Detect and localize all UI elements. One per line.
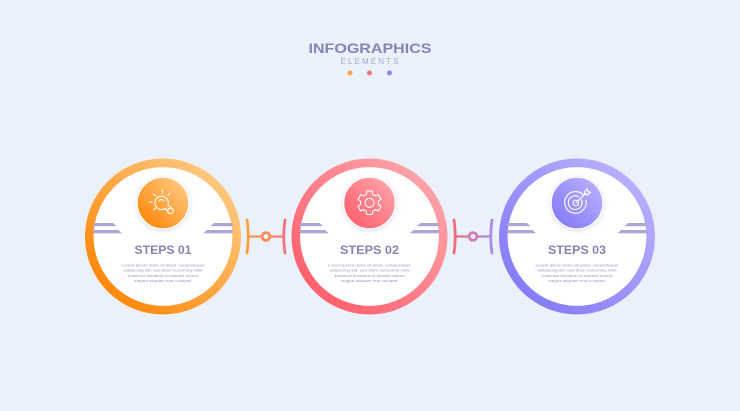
- connector 1: [247, 220, 285, 253]
- step 02 body text: magna aliquam erat volutpat.: [340, 278, 398, 283]
- decorative bars left: [507, 223, 536, 233]
- title: INFOGRAPHICS: [308, 40, 432, 56]
- decorative bars left: [93, 223, 122, 233]
- icon: gear badge: [344, 177, 395, 229]
- step 02 body text: euismod tincidunt ut laoreet dolore: [334, 273, 406, 278]
- panel: step 02: [296, 163, 443, 310]
- decorative bars right: [410, 223, 440, 233]
- step 03 body text: [536, 262, 619, 283]
- step 01 heading: STEPS 01: [134, 245, 192, 257]
- step 02 body text: Lorem ipsum dolor sit amet, consectetuer: [328, 262, 412, 268]
- step 03 body text: euismod tincidunt ut laoreet dolore: [542, 273, 613, 278]
- step 03 body text: adipiscing elit, sed diam nonummy nibh: [538, 268, 616, 272]
- step 01 body text: [122, 262, 205, 283]
- step 01 body text: euismod tincidunt ut laoreet dolore: [128, 273, 199, 278]
- panel: step 01: [89, 163, 237, 310]
- step 02 body text: [328, 262, 412, 283]
- icon: light bulb badge: [137, 177, 189, 229]
- step 03 heading: STEPS 03: [548, 245, 606, 257]
- connector 2: [454, 220, 492, 253]
- decorative bars right: [204, 223, 233, 233]
- subtitle: ELEMENTS: [340, 57, 398, 66]
- icon: target badge: [551, 177, 603, 229]
- step 02 heading: STEPS 02: [340, 245, 399, 257]
- decorative bars right: [618, 223, 647, 233]
- step 01 body text: adipiscing elit, sed diam nonummy nibh: [124, 268, 202, 272]
- step 01 body text: Lorem ipsum dolor sit amet, consectetuer: [122, 262, 205, 268]
- decorative bars left: [300, 223, 328, 233]
- step 03 body text: Lorem ipsum dolor sit amet, consectetuer: [536, 262, 619, 268]
- panel: step 03: [503, 163, 651, 310]
- step 02 body text: adipiscing elit, sed diam nonummy nibh: [330, 268, 409, 272]
- title dots: [348, 70, 392, 76]
- step 01 body text: magna aliquam erat volutpat.: [134, 278, 192, 283]
- step 03 body text: magna aliquam erat volutpat.: [548, 278, 606, 283]
- title: [308, 40, 432, 66]
